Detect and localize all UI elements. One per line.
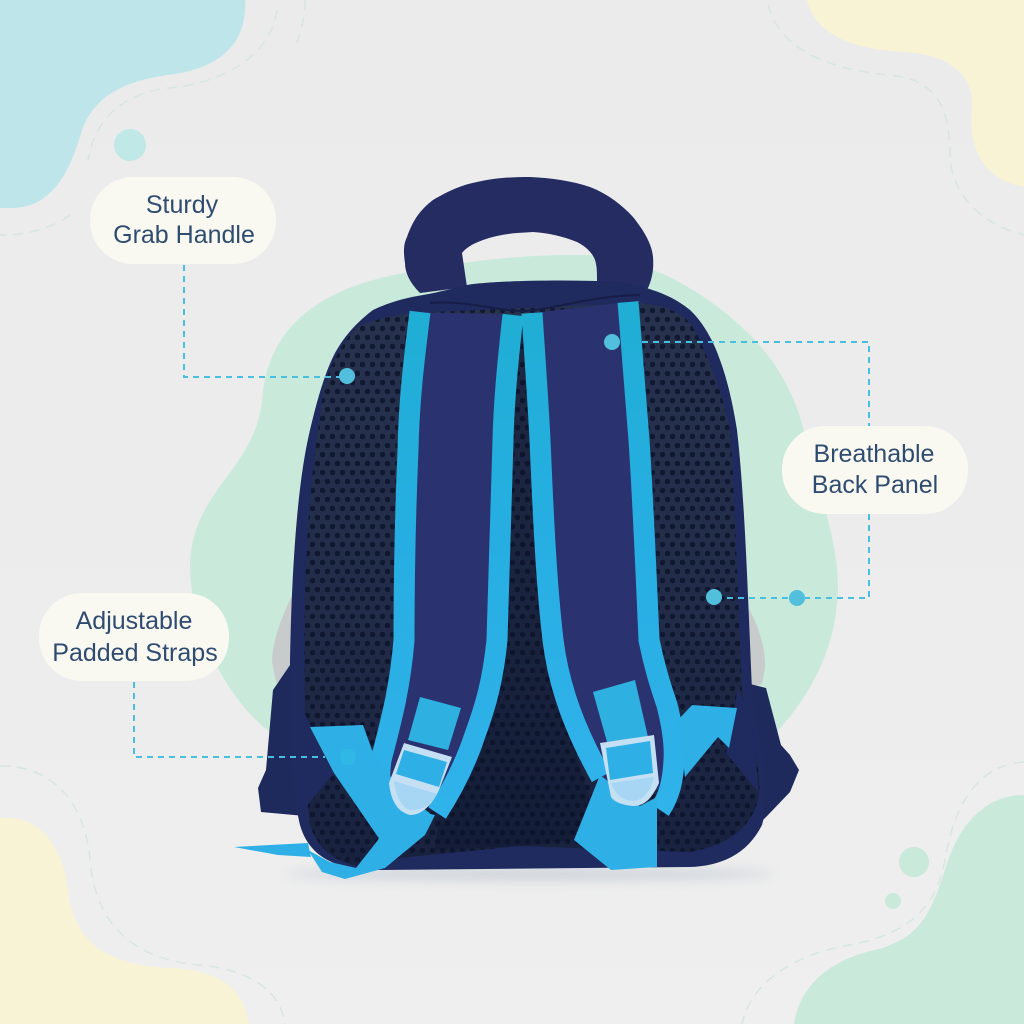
callout: Adjustable Padded Straps: Adjustable — [76, 607, 192, 635]
side wings — [258, 665, 799, 835]
backpack body — [290, 281, 766, 870]
callout: Breathable Back Panel: Back Panel — [812, 471, 938, 499]
left lower webbing — [234, 697, 461, 879]
blob: bottom left — [0, 818, 249, 1024]
strap blue binding — [380, 302, 674, 820]
connector: handle — [184, 265, 355, 384]
callout: Sturdy Grab Handle — [90, 177, 276, 264]
breathable mesh back panel — [304, 303, 759, 866]
icon: right buckle — [600, 735, 659, 806]
right strap — [532, 302, 674, 790]
callout: Breathable Back Panel: Breathable — [814, 440, 934, 468]
blob: top left — [0, 0, 245, 208]
top seam — [430, 295, 640, 311]
lower navy flaps — [298, 688, 759, 807]
connector: straps — [134, 682, 356, 765]
backpack shadow — [285, 867, 775, 881]
icon: side mesh pockets — [272, 588, 765, 690]
callout: Adjustable Padded Straps — [39, 593, 229, 681]
green blob behind backpack — [190, 255, 838, 760]
decorative dots — [114, 129, 929, 909]
callout: Sturdy Grab Handle: Grab Handle — [113, 221, 255, 249]
callout: Breathable Back Panel — [782, 426, 968, 514]
left strap — [383, 312, 513, 810]
callout: Adjustable Padded Straps: Padded Straps — [52, 639, 218, 667]
callout: Sturdy Grab Handle: Sturdy — [146, 191, 219, 219]
blob: bottom right — [794, 795, 1024, 1024]
connector: back panel — [604, 334, 869, 606]
icon: grab handle — [404, 177, 653, 293]
right lower webbing — [574, 680, 737, 870]
icon: left buckle — [389, 743, 452, 815]
blob: top right — [807, 0, 1024, 187]
backpack — [234, 177, 799, 881]
